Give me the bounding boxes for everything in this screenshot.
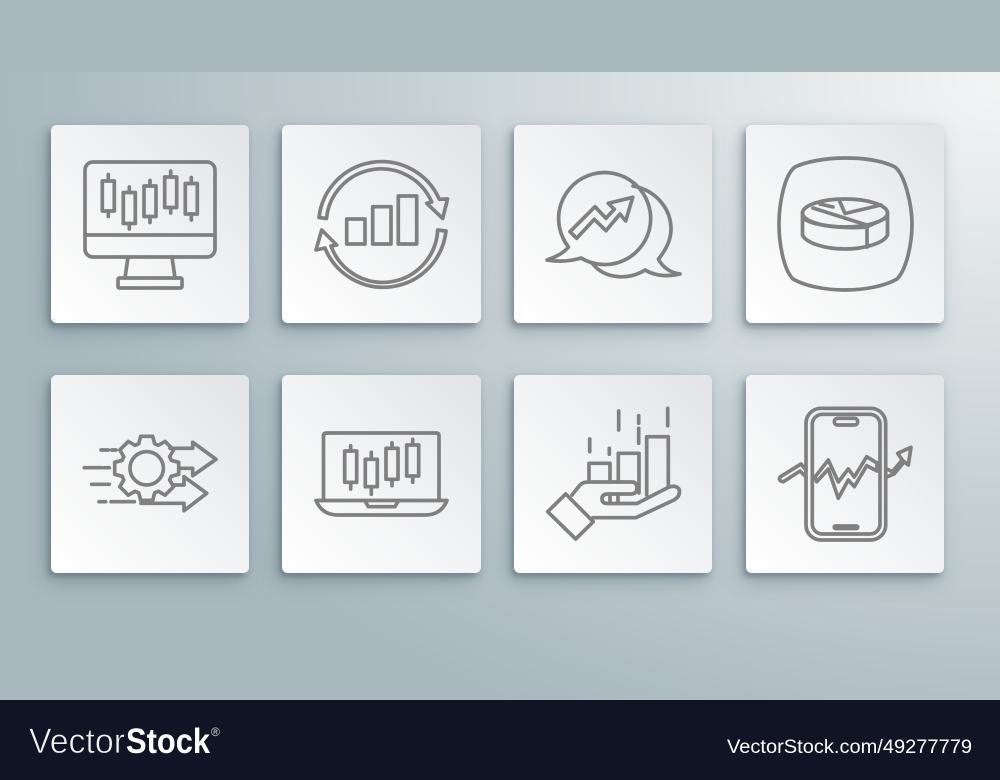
icon: smartphone with rising line chart [779, 408, 911, 540]
panel: smartphone chart [746, 375, 944, 573]
footer bar [0, 700, 1000, 780]
icon: hand holding growth bars [548, 408, 679, 539]
icon: gear with speed arrows [84, 436, 216, 511]
registered mark: ® [211, 725, 220, 739]
footer logo bold word: Stock [126, 722, 210, 761]
icon: circular arrows around bars [316, 162, 448, 287]
panel: chat bubbles [514, 125, 712, 323]
icon: laptop candlestick chart [316, 433, 447, 515]
top background strip [0, 0, 1000, 72]
panel: gear with arrows [51, 375, 249, 573]
panel: hand holding bars [514, 375, 712, 573]
footer image id: VectorStock.com/49277779 [727, 736, 972, 758]
icon: 3D pie chart in rounded frame [779, 158, 912, 290]
footer logo: Vector [29, 722, 125, 761]
icon: speech bubbles with rising arrow [547, 173, 680, 277]
panel: pie chart tile [746, 125, 944, 323]
panel: laptop with candlesticks [282, 375, 481, 573]
panel: monitor with candlesticks [51, 125, 249, 323]
icon: desktop monitor candlestick chart [85, 162, 215, 288]
panel: refresh bar chart [282, 125, 481, 323]
